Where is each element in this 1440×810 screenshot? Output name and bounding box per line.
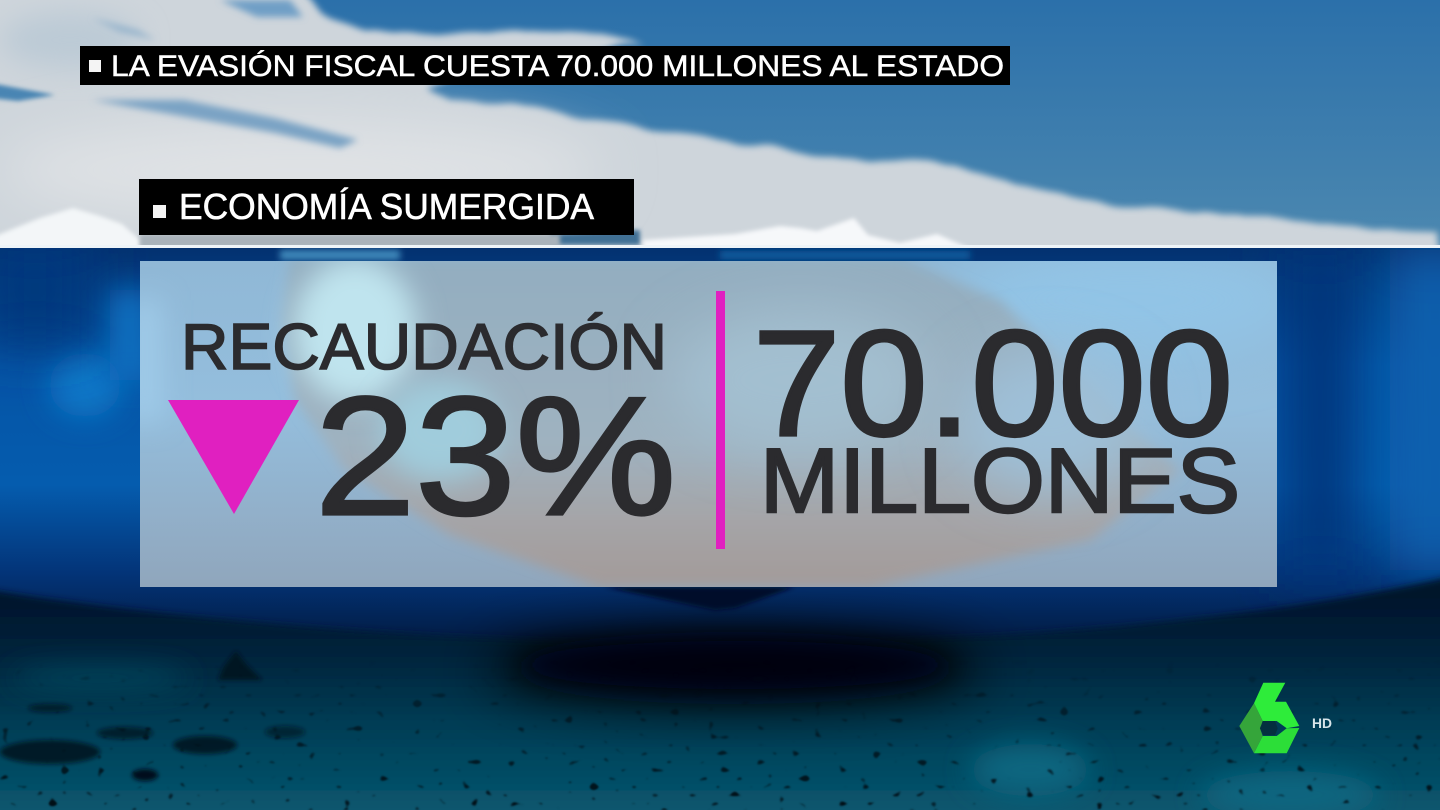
- submerged iceberg tip below the panel: [605, 587, 795, 610]
- seabed stones: [0, 677, 1436, 810]
- divider line: [716, 291, 725, 549]
- waterline: [0, 245, 1440, 248]
- panel: statistics box: [130, 240, 1310, 587]
- icon: down triangle: [168, 400, 299, 514]
- light and dark areas of the water: [0, 235, 1440, 575]
- value: 23%: 23%: [315, 362, 676, 550]
- label: millones: MILLONES: [760, 431, 1240, 532]
- cloud bank: [0, 0, 1440, 260]
- iceberg tips above the water: [0, 208, 966, 245]
- dark stone clusters: [0, 704, 305, 781]
- icon: channel logo: HD: [1312, 715, 1332, 731]
- sea floor: [0, 572, 1440, 810]
- background: underwater scene: [0, 235, 1440, 810]
- value: 70.000: 70.000: [753, 299, 1233, 467]
- label: recaudación: RECAUDACIÓN: [181, 310, 667, 383]
- background: sky with clouds: [0, 0, 1440, 260]
- panel background with iceberg: [130, 240, 1310, 587]
- icon: channel logo: [1239, 683, 1332, 753]
- headline bar: LA EVASIÓN FISCAL CUESTA 70.000 MILLONES AL ESTADO: [111, 50, 1004, 83]
- section label bar: ECONOMÍA SUMERGIDA: [179, 186, 594, 227]
- section label bar: [139, 179, 634, 235]
